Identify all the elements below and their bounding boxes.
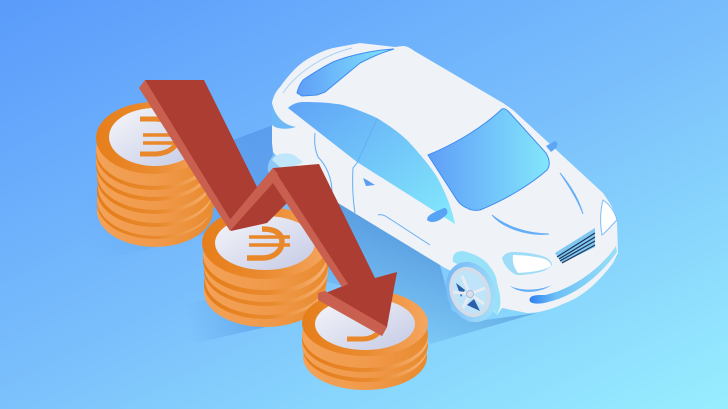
- door handle: [363, 178, 375, 186]
- icon: currency symbol: [140, 119, 190, 154]
- front wheel: [437, 254, 505, 330]
- roof highlight line: [283, 48, 352, 93]
- rear wheel hub: [272, 153, 303, 172]
- arrow side bands: [139, 80, 387, 336]
- rear window: [297, 49, 394, 96]
- windshield: [428, 109, 549, 210]
- mirrors: [546, 141, 557, 152]
- car: [268, 43, 618, 330]
- hood lines: [492, 173, 583, 234]
- rear wheel: [268, 150, 320, 200]
- grille: [555, 228, 595, 263]
- arrow: downward trend: [139, 80, 397, 336]
- car body: [272, 43, 618, 315]
- headlight: [502, 252, 552, 275]
- right headlight: [601, 200, 617, 235]
- arrow face: [145, 80, 397, 336]
- front wheel arch: [453, 251, 500, 315]
- door lines: [315, 119, 430, 245]
- side windows: [288, 102, 455, 224]
- shadows: [80, 125, 537, 344]
- icon: currency symbol: [347, 328, 382, 339]
- icon: currency symbol: [247, 229, 290, 258]
- coin stack: middle: [202, 207, 328, 327]
- coin stack: left: [96, 102, 215, 247]
- bumper: [510, 246, 617, 304]
- rear light: [272, 103, 296, 129]
- coin stack: right: [302, 290, 428, 390]
